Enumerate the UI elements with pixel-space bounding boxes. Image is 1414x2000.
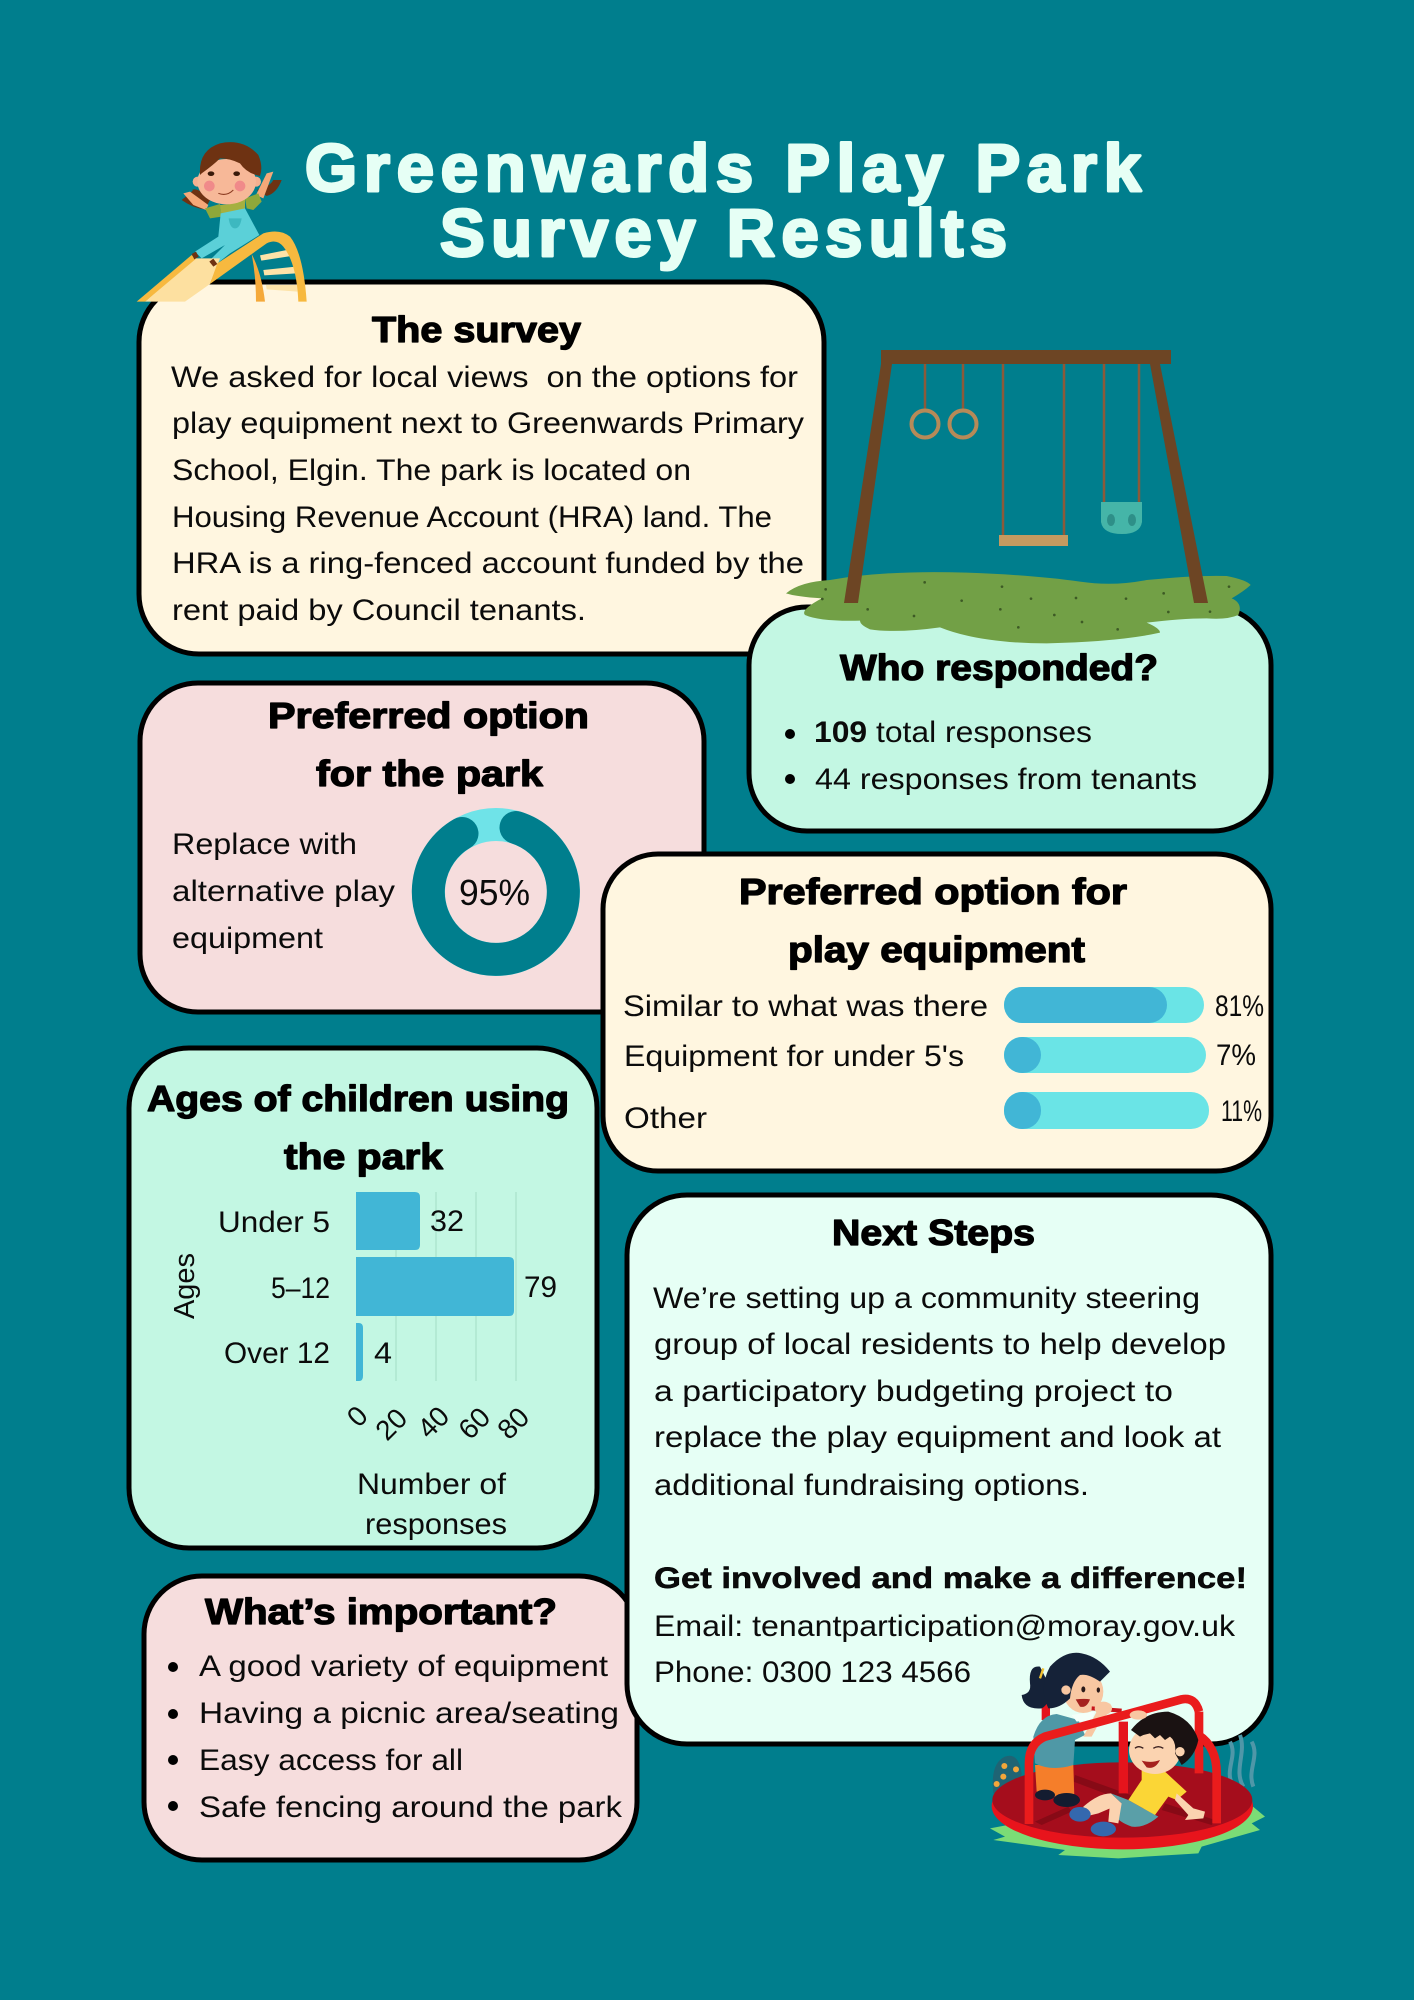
heading: preferred option for play equipment (739, 871, 1127, 970)
text block: get involved contact details: Phone: 0300 123 4566 (654, 1656, 971, 1689)
chart: horizontal bar chart of ages: 80 (491, 1401, 535, 1445)
list: response counts (785, 716, 1197, 796)
chart: horizontal bar chart of ages (169, 1192, 557, 1541)
chart: horizontal bar chart of ages: responses (365, 1508, 507, 1541)
heading: next steps: Next Steps (832, 1212, 1035, 1253)
text block: replace with alternative play equipment: equipment (172, 922, 324, 955)
list: important features (168, 1650, 623, 1824)
text block: survey description: We asked for local views on the options for (171, 361, 798, 394)
chart: play equipment progress bars: 81% (1215, 990, 1264, 1023)
chart: 95% donut: 95% (459, 872, 530, 913)
text block: replace with alternative play equipment: alternative play (172, 875, 395, 908)
heading: ages of children using the park (147, 1078, 569, 1177)
list: important features: Safe fencing around the park (199, 1791, 623, 1824)
chart: horizontal bar chart of ages: 4 (374, 1337, 392, 1370)
panel: next steps (627, 1195, 1271, 1744)
chart: horizontal bar chart of ages: Ages (169, 1253, 201, 1319)
icon: swing set on grass (786, 350, 1251, 643)
text block: survey description: HRA is a ring-fenced account funded by the (172, 547, 804, 580)
chart: horizontal bar chart of ages: 32 (430, 1205, 464, 1238)
text block: next steps description: additional fundraising options. (654, 1469, 1089, 1502)
heading: what's important: What’s important? (205, 1591, 557, 1632)
icon: children on roundabout (990, 1653, 1265, 1858)
heading: ages of children using the park: the park (284, 1136, 444, 1177)
heading: ages of children using the park: Ages of children using (147, 1078, 569, 1119)
text block: survey description (171, 361, 804, 627)
chart: play equipment progress bars: Similar to what was there (623, 990, 988, 1023)
text block: replace with alternative play equipment (172, 828, 395, 955)
text block: get involved contact details (654, 1562, 1247, 1689)
chart: horizontal bar chart of ages: 0 (341, 1400, 374, 1433)
panel: the survey (139, 282, 824, 654)
panel: preferred option for play equipment (603, 854, 1271, 1171)
list: response counts: 44 responses from tenants (815, 763, 1197, 796)
chart: play equipment progress bars (623, 987, 1264, 1135)
text block: next steps description: group of local residents to help develop (654, 1328, 1226, 1361)
heading: the survey: The survey (372, 309, 581, 350)
chart: horizontal bar chart of ages: 60 (452, 1401, 496, 1445)
chart: play equipment progress bars: Equipment for under 5's (624, 1040, 964, 1073)
title: Greenwards Play Park (305, 131, 1142, 206)
chart: horizontal bar chart of ages: 79 (524, 1271, 557, 1304)
chart: play equipment progress bars: 7% (1216, 1039, 1256, 1072)
text block: survey description: play equipment next to Greenwards Primary (172, 407, 804, 440)
text block: survey description: School, Elgin. The park is located on (172, 454, 691, 487)
panel: preferred option for the park (140, 683, 704, 1012)
icon: girl on slide (137, 142, 307, 302)
text block: survey description: Housing Revenue Account (HRA) land. The (172, 501, 772, 534)
list: important features: Having a picnic area/seating (199, 1697, 619, 1730)
text block: next steps description: replace the play equipment and look at (654, 1421, 1222, 1454)
boy (1069, 1710, 1205, 1836)
chart: horizontal bar chart of ages: Over 12 (224, 1337, 330, 1370)
chart: horizontal bar chart of ages: 20 (369, 1402, 413, 1446)
chart: horizontal bar chart of ages: Under 5 (218, 1206, 330, 1239)
text block: survey description: rent paid by Council tenants. (172, 594, 586, 627)
girl (1022, 1653, 1122, 1807)
heading: preferred option for play equipment: play equipment (788, 929, 1085, 970)
list: important features: Easy access for all (199, 1744, 463, 1777)
chart: horizontal bar chart of ages: 5–12 (271, 1272, 330, 1305)
text block: next steps description: We’re setting up a community steering (653, 1282, 1200, 1315)
title (305, 131, 1142, 271)
text block: next steps description (653, 1282, 1226, 1502)
chart: horizontal bar chart of ages: 40 (411, 1400, 455, 1444)
text block: get involved contact details: Email: tenantparticipation@moray.gov.uk (654, 1610, 1236, 1643)
text block: replace with alternative play equipment: Replace with (172, 828, 357, 861)
list: important features: A good variety of equipment (199, 1650, 609, 1683)
chart: play equipment progress bars: Other (624, 1102, 707, 1135)
title: Survey Results (440, 196, 1007, 271)
panel: what's important (144, 1576, 637, 1860)
chart: 95% donut (428, 824, 564, 960)
heading: preferred option for the park: for the park (316, 753, 544, 794)
text block: next steps description: a participatory budgeting project to (654, 1375, 1173, 1408)
chart: play equipment progress bars: 11% (1221, 1095, 1262, 1128)
panel: who responded (749, 607, 1271, 831)
chart: horizontal bar chart of ages: Number of (357, 1468, 507, 1501)
panel: ages of children (129, 1048, 597, 1548)
text block: get involved contact details: Get involved and make a difference! (654, 1562, 1247, 1595)
heading: preferred option for play equipment: Preferred option for (739, 871, 1127, 912)
heading: preferred option for the park: Preferred option (268, 695, 589, 736)
heading: preferred option for the park (268, 695, 589, 794)
list: response counts: 109 total responses (814, 716, 1092, 749)
heading: who responded: Who responded? (840, 647, 1158, 688)
